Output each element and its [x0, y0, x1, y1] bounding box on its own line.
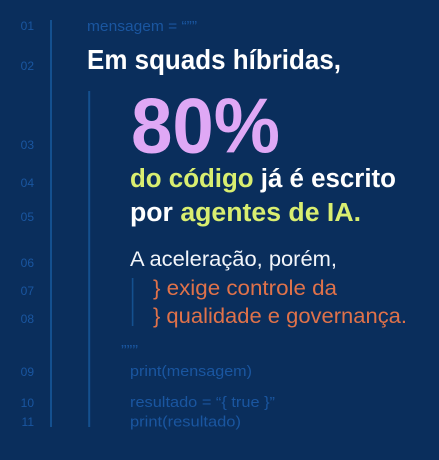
code block footer: resultado = “{ true }”	[130, 394, 275, 411]
code block footer: print(resultado)	[130, 414, 241, 430]
code block footer: print(mensagem)	[130, 363, 252, 380]
warning line 1: } exige controle da	[153, 276, 337, 300]
subtext: a aceleração: A aceleração, porém,	[130, 247, 337, 271]
code line: mensagem: mensagem = “””	[87, 18, 197, 35]
line numbers: 07	[21, 284, 34, 298]
code block footer	[121, 342, 275, 430]
line numbers: 05	[21, 210, 34, 224]
line numbers: 08	[21, 312, 34, 326]
line numbers: 04	[21, 176, 34, 190]
warning line 2: } qualidade e governança.	[153, 304, 407, 328]
line numbers: 01	[21, 19, 34, 33]
statement: do código já é escrito: do código já é escrito	[130, 165, 396, 193]
line numbers: 03	[21, 138, 34, 152]
big number: 80%: 80%	[131, 82, 280, 170]
line numbers: 02	[21, 59, 34, 73]
line numbers: 06	[21, 256, 34, 270]
code block footer: ”””	[121, 342, 138, 359]
line numbers: 09	[21, 365, 34, 379]
line numbers	[21, 19, 34, 429]
line numbers: 10	[21, 396, 34, 410]
statement: por agentes de IA: por agentes de IA.	[130, 199, 361, 227]
heading: Em squads híbridas,	[87, 44, 341, 75]
line numbers: 11	[22, 415, 34, 429]
